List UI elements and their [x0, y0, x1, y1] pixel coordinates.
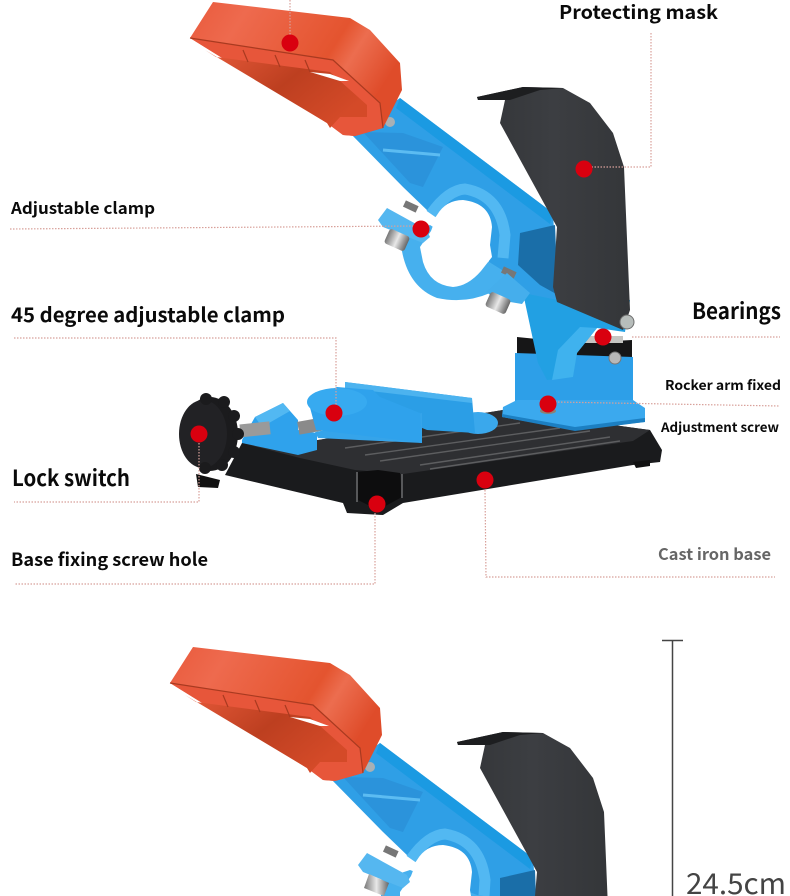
- red handle: [190, 2, 402, 136]
- clamp body: [400, 225, 510, 300]
- label: adjustment screw: Adjustment screw: [660, 417, 779, 436]
- red marker dots: [190, 34, 612, 512]
- lower clamp lug: [358, 845, 410, 896]
- label: bearings: Bearings: [692, 294, 781, 326]
- label: 45 degree adjustable clamp: 45 degree adjustable clamp: [11, 299, 285, 328]
- bearing block top: [517, 336, 632, 358]
- label: adjustable clamp: Adjustable clamp: [10, 195, 155, 219]
- left clamp lug with screw: [378, 200, 430, 252]
- leader lines: [10, 0, 780, 584]
- clamp collar: [431, 189, 505, 258]
- height dimension line: [662, 640, 683, 896]
- round block and plate: [307, 387, 422, 443]
- blue fence: [345, 382, 475, 433]
- right clamp lug with screw: [485, 266, 530, 315]
- bolt at handle: [385, 117, 395, 127]
- blue rocker arm: [350, 98, 558, 300]
- fence disc: [458, 412, 498, 434]
- screw thread: [239, 417, 329, 437]
- lower clamp collar: [411, 834, 485, 896]
- clamp opening: [420, 200, 492, 287]
- blue vise slide: [242, 403, 317, 455]
- lower blue arm: [330, 743, 536, 896]
- cast iron base: [196, 410, 662, 515]
- label: rocker arm fixed: Rocker arm fixed: [665, 374, 781, 394]
- label: base fixing screw hole: Base fixing screw hole: [11, 546, 208, 572]
- lower handle bolt: [365, 762, 375, 772]
- lower red handle: [170, 647, 382, 781]
- label: cast iron base: Cast iron base: [658, 541, 771, 565]
- label: lock switch: Lock switch: [12, 461, 130, 493]
- rocker arm leg: [507, 273, 630, 380]
- bearing block: [502, 352, 645, 431]
- lower product view: [170, 647, 608, 896]
- lock switch knob: [179, 393, 244, 474]
- lower clamp opening: [400, 845, 472, 896]
- upper assembly: arm, clamp, handle, mask: [190, 2, 630, 330]
- lower protecting mask: [457, 732, 608, 896]
- mask pivot bolt: [620, 315, 634, 329]
- protecting mask: [477, 87, 630, 330]
